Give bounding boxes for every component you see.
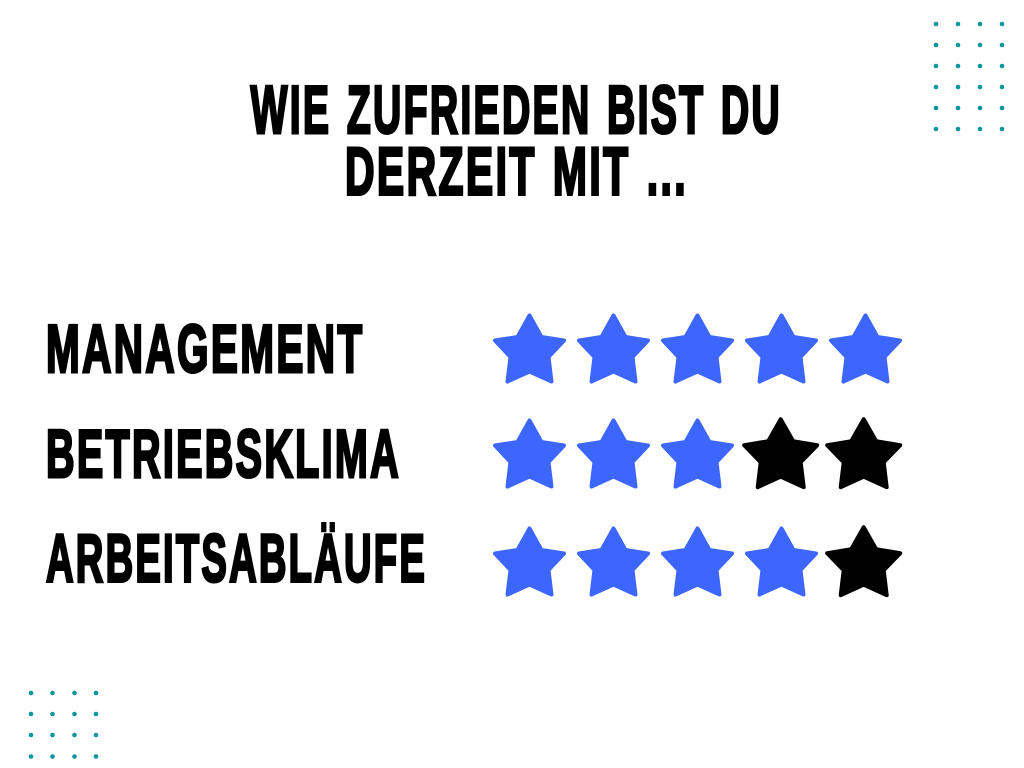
label: Management: MANAGEMENT	[46, 311, 364, 387]
title	[250, 72, 782, 210]
label: Arbeitsabläufe: ARBEITSABLÄUFE	[46, 520, 427, 596]
label: Betriebsklima: BETRIEBSKLIMA	[46, 416, 401, 492]
rating row: Betriebsklima, 3 of 5 stars	[495, 419, 900, 487]
rating row: Management, 5 of 5 stars	[495, 316, 900, 382]
dot pattern: bottom left	[29, 691, 98, 759]
title: DERZEIT MIT ...	[345, 134, 688, 210]
dot pattern: top right	[934, 22, 1004, 131]
rating row: Arbeitsabläufe, 4 of 5 stars	[495, 527, 900, 595]
